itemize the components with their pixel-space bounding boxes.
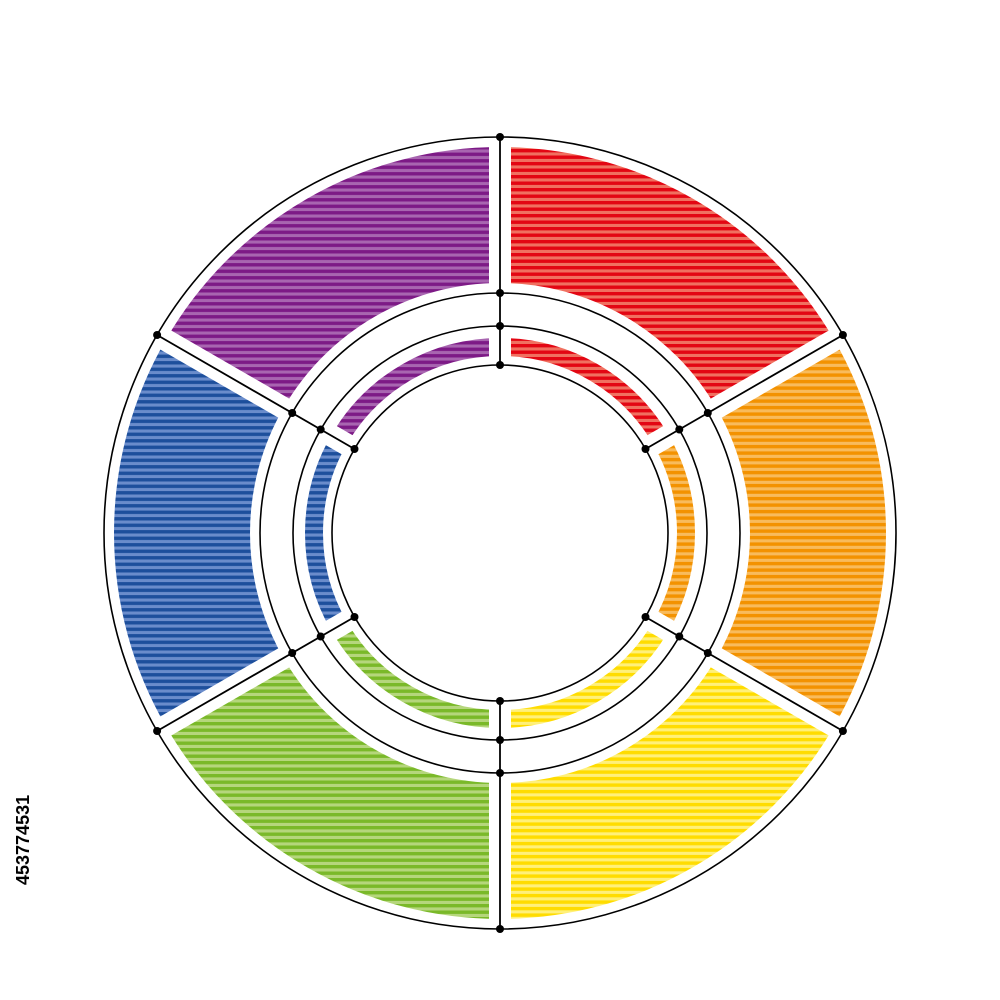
ring outlines xyxy=(104,137,896,929)
outer ring segments xyxy=(66,99,934,967)
dividers xyxy=(157,137,843,929)
inner ring segments xyxy=(246,279,754,787)
stock id text: 453774531 xyxy=(13,795,33,885)
junction dots xyxy=(153,133,847,933)
